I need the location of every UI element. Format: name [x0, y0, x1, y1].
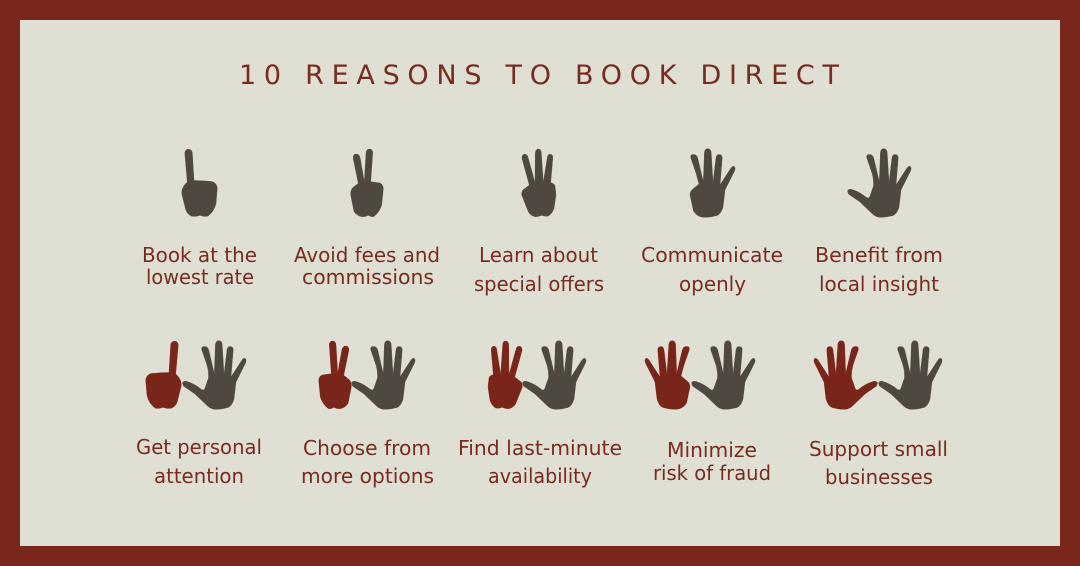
- caption: Communicate: [641, 243, 783, 267]
- caption: [301, 436, 434, 488]
- caption: [294, 243, 440, 289]
- caption: commissions: [302, 265, 434, 289]
- caption: lowest rate: [146, 265, 254, 289]
- caption: [474, 243, 604, 296]
- icon: nine fingers, red and grey hands: [645, 341, 755, 409]
- reason 10: support small businesses: [809, 341, 948, 489]
- caption: availability: [488, 464, 592, 488]
- caption: businesses: [825, 465, 933, 489]
- caption: Choose from: [303, 436, 431, 460]
- title: 10 REASONS TO BOOK DIRECT: [239, 60, 840, 91]
- caption: special offers: [474, 272, 604, 296]
- reason 5: benefit from local insight: [815, 149, 943, 296]
- caption: Get personal: [136, 435, 262, 459]
- icon: two fingers hand: [351, 149, 383, 217]
- icon: four fingers hand: [690, 149, 735, 217]
- icon: six fingers, red and grey hands: [146, 341, 246, 409]
- caption: Benefit from: [815, 243, 943, 267]
- caption: [142, 243, 257, 289]
- caption: local insight: [819, 272, 939, 296]
- caption: [136, 435, 262, 488]
- icon: five fingers hand: [848, 149, 911, 217]
- caption: more options: [301, 464, 434, 488]
- caption: Support small: [809, 437, 948, 461]
- reason 8: find last-minute availability: [458, 341, 622, 488]
- icon: one finger hand: [182, 149, 217, 217]
- caption: [815, 243, 943, 296]
- reason 4: communicate openly: [641, 149, 783, 296]
- icon: eight fingers, red and grey hands: [488, 341, 586, 409]
- icon: ten fingers, red and grey hands: [814, 341, 942, 409]
- caption: Learn about: [479, 243, 598, 267]
- reason 7: choose from more options: [301, 341, 434, 488]
- caption: attention: [154, 464, 244, 488]
- caption: openly: [679, 272, 746, 296]
- reason 9: minimize risk of fraud: [645, 341, 771, 485]
- caption: Avoid fees and: [294, 243, 440, 267]
- icon: three fingers hand: [522, 149, 556, 217]
- reason 6: get personal attention: [136, 341, 262, 488]
- caption: risk of fraud: [653, 461, 771, 485]
- caption: [458, 436, 622, 488]
- reason 3: learn about special offers: [474, 149, 604, 296]
- caption: [653, 438, 771, 485]
- caption: Book at the: [142, 243, 257, 267]
- icon: seven fingers, red and grey hands: [319, 341, 415, 409]
- caption: [641, 243, 783, 296]
- caption: [809, 437, 948, 489]
- reason 2: avoid fees and commissions: [294, 149, 440, 289]
- caption: Minimize: [667, 438, 757, 462]
- reason 1: book at the lowest rate: [142, 149, 257, 289]
- caption: Find last-minute: [458, 436, 622, 460]
